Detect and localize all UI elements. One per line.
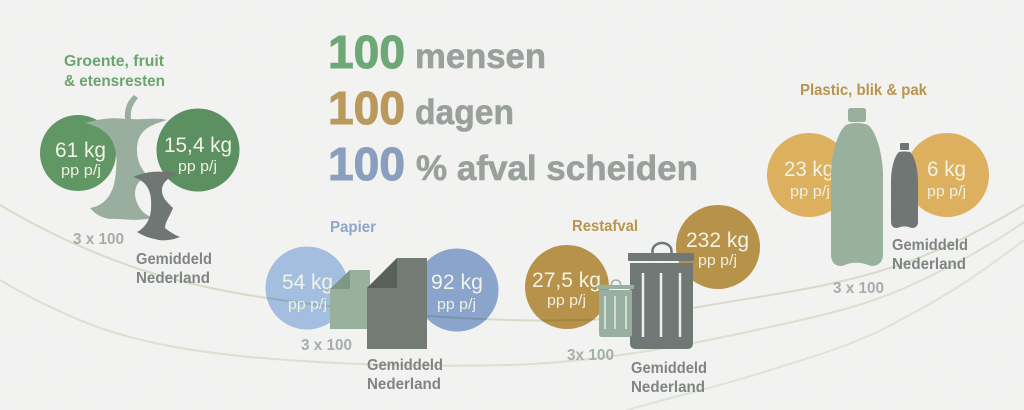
label: gemiddeld nederland: Nederland [892, 256, 966, 273]
value: 232 kg: 232 kg [686, 228, 749, 252]
headline row: 100 dagen: dagen [415, 93, 514, 132]
panel: papier [266, 219, 498, 393]
unit: pp p/j: pp p/j [698, 253, 737, 269]
value: 54 kg: 54 kg [282, 270, 333, 294]
headline row: 100 dagen: 100 [328, 82, 405, 134]
label: gemiddeld nederland: Nederland [631, 379, 705, 396]
heading: groente: & etensresten [64, 73, 165, 90]
label: gemiddeld nederland: Nederland [136, 270, 210, 287]
label: gemiddeld nederland: Gemiddeld [367, 357, 443, 374]
icon: large apple core [85, 95, 167, 220]
unit: pp p/j: pp p/j [178, 159, 217, 175]
value: 15,4 kg: 15,4 kg [164, 133, 232, 157]
heading: papier: Papier [330, 219, 376, 236]
circle: 15,4 kg [156, 108, 240, 192]
label: gemiddeld nederland: Gemiddeld [892, 237, 968, 254]
icon: small trash can [598, 280, 634, 337]
panel: groente, fruit en etensresten [40, 53, 240, 287]
headline row: 100 % afval scheiden: % afval scheiden [416, 149, 698, 188]
label: gemiddeld nederland [631, 360, 707, 396]
value: 6 kg: 6 kg [927, 157, 966, 181]
heading: restafval: Restafval [572, 218, 638, 235]
headline [328, 26, 698, 190]
label: 3x 100: 3x 100 [567, 347, 614, 364]
unit: pp p/j: pp p/j [61, 163, 101, 179]
circle: 61 kg [40, 115, 116, 191]
label: 3 x 100: 3 x 100 [833, 280, 884, 297]
label: gemiddeld nederland: Gemiddeld [631, 360, 707, 377]
label: gemiddeld nederland: Nederland [367, 376, 441, 393]
circle: 27,5 kg [525, 245, 609, 329]
heading: groente: Groente, fruit [64, 53, 164, 70]
circle: 232 kg [676, 205, 760, 289]
icon: small apple core [133, 172, 180, 240]
unit: pp p/j: pp p/j [547, 293, 586, 309]
unit: pp p/j: pp p/j [927, 184, 966, 200]
unit: pp p/j: pp p/j [790, 184, 830, 200]
label: 3 x 100: 3 x 100 [73, 231, 124, 248]
headline row: 100 % afval scheiden: 100 [328, 138, 405, 190]
label: gemiddeld nederland [892, 237, 968, 273]
heading: groente [64, 53, 165, 90]
icon: large paper sheet [367, 258, 427, 349]
heading: plastic: Plastic, blik & pak [800, 82, 927, 99]
label: gemiddeld nederland [367, 357, 443, 393]
icon: small paper sheet [330, 270, 370, 329]
headline row: 100 mensen: mensen [415, 37, 546, 76]
value: 27,5 kg: 27,5 kg [532, 268, 601, 292]
unit: pp p/j: pp p/j [288, 297, 327, 313]
headline row: 100 mensen [328, 26, 546, 78]
label: gemiddeld nederland [136, 251, 212, 287]
circle: 6 kg [905, 133, 989, 217]
headline row: 100 % afval scheiden [328, 138, 698, 190]
headline row: 100 dagen [328, 82, 514, 134]
panel: plastic, blik en pak [767, 82, 989, 297]
value: 92 kg: 92 kg [431, 270, 483, 294]
circle: 54 kg [266, 246, 348, 330]
label: gemiddeld nederland: Gemiddeld [136, 251, 212, 268]
value: 61 kg: 61 kg [55, 138, 106, 162]
label: 3 x 100: 3 x 100 [301, 337, 352, 354]
icon: large bottle [831, 108, 883, 266]
value: 23 kg: 23 kg [784, 157, 834, 181]
icon: small bottle [891, 143, 918, 228]
icon: large trash can [628, 243, 694, 349]
unit: pp p/j: pp p/j [437, 297, 476, 313]
headline row: 100 mensen: 100 [328, 26, 405, 78]
circle: 92 kg [416, 248, 498, 332]
circle: 23 kg [767, 133, 851, 217]
panel: restafval [525, 205, 760, 396]
